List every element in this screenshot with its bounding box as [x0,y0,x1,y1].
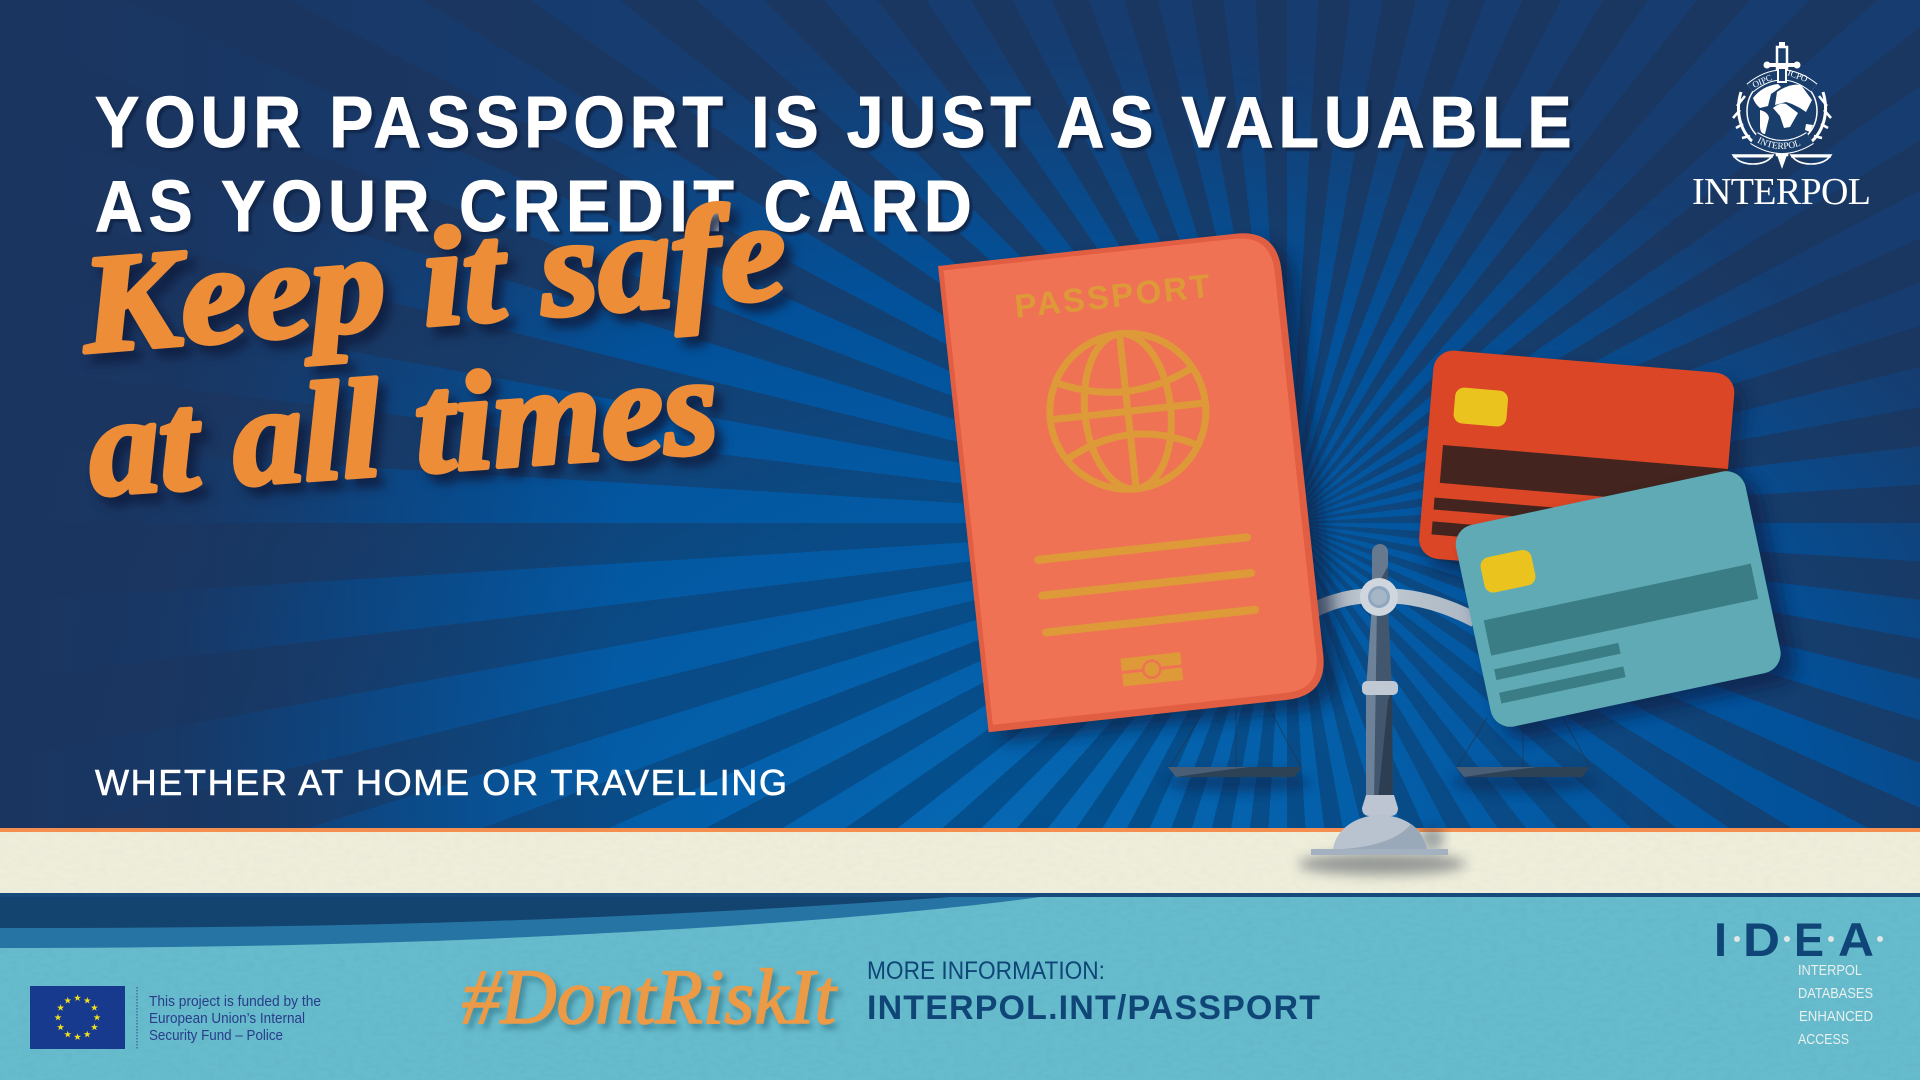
hashtag: #DontRiskIt [462,953,838,1040]
icon: EU flag [30,986,125,1049]
IDEA expansion: INTERPOL [1798,962,1862,979]
icon: laurel wreath [1733,92,1831,148]
script slogan: keep it safe at all times: at all times [83,327,723,526]
more information: MORE INFORMATION: [867,957,1105,985]
passport [938,228,1343,744]
card stripes [1431,445,1728,559]
scale pans and strings [1166,704,1596,792]
icon: globe [1041,324,1215,498]
IDEA logo: D [1743,913,1780,966]
footer wave shapes [0,897,1040,948]
cream shelf band [0,828,1920,897]
banner: INTERPOL [1750,132,1814,154]
icon: sword [1764,42,1800,169]
IDEA expansion [1798,962,1873,1048]
scales illustration [1166,544,1596,875]
title [95,81,1572,247]
script slogan: keep it safe at all times [74,173,791,526]
funding text: This project is funded by the [149,994,321,1010]
background: sunburst rays [0,0,1920,830]
passport biometric emblem [1120,652,1183,686]
IDEA logo: I [1714,913,1727,966]
logo wordmark: INTERPOL [1692,171,1871,213]
EU funding block [30,986,321,1049]
credit card: teal [1452,465,1799,744]
INTERPOL logo [1692,42,1871,213]
icon: globe [1747,76,1817,146]
funding text: Security Fund – Police [149,1028,283,1044]
scale hub [1360,578,1398,616]
banner: OIPC ICPO: OIPC [1751,72,1774,90]
funding text [149,994,321,1044]
IDEA logo [1714,913,1883,1048]
tagline: WHETHER AT HOME OR TRAVELLING [95,762,787,803]
more information [867,957,1320,1027]
IDEA expansion: DATABASES [1798,985,1873,1002]
credit card: red [1416,349,1748,596]
title: YOUR PASSPORT IS JUST AS VALUABLE [95,81,1572,163]
IDEA logo: A [1838,913,1874,966]
scale collar [1362,681,1398,695]
scale beam [1310,596,1475,620]
footer panel: teal paper [0,895,1920,1080]
passport cover [938,229,1328,732]
title: AS YOUR CREDIT CARD [95,165,972,247]
script slogan: keep it safe at all times: Keep it safe [74,173,791,383]
IDEA logo: E [1794,913,1824,966]
passport label: PASSPORT [1013,267,1212,325]
card stripes [1484,564,1768,704]
banner: INTERPOL: INTERPOL [1757,136,1800,150]
card chip [1479,548,1537,594]
scale base [1298,795,1466,875]
IDEA expansion: ENHANCED [1799,1008,1873,1025]
icon: scales under emblem [1733,155,1831,164]
passport lines [1038,537,1255,632]
funding text: European Union’s Internal [149,1011,305,1027]
IDEA expansion: ACCESS [1798,1031,1849,1048]
banner: OIPC ICPO: ICPO [1786,67,1809,84]
more information: INTERPOL.INT/PASSPORT [867,989,1320,1027]
banner: OIPC ICPO [1750,67,1814,90]
scale post [1366,544,1393,800]
card chip [1453,387,1509,427]
